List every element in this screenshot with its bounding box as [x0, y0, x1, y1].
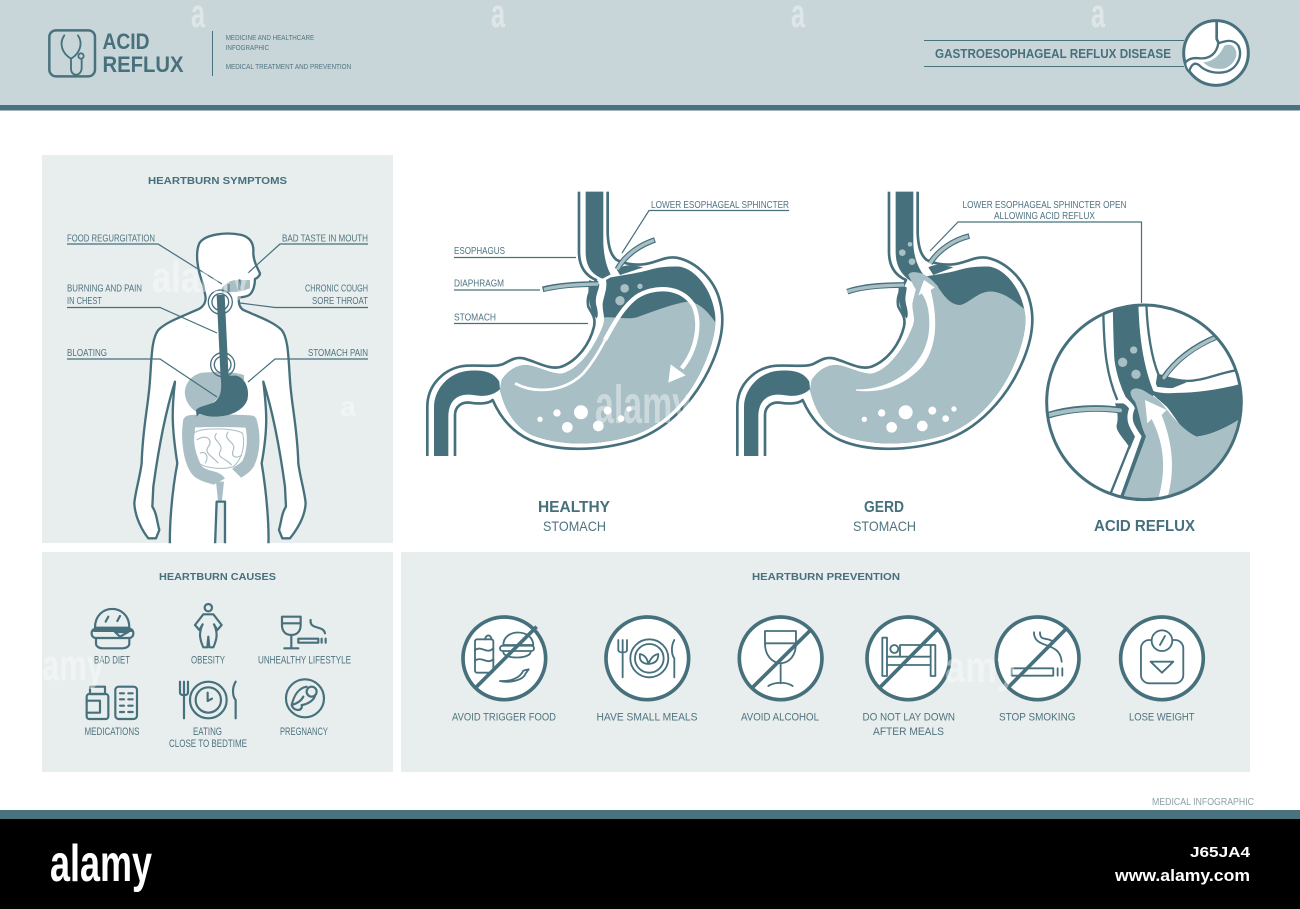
body silhouette — [134, 234, 306, 547]
esophagus lumen and gas — [1113, 302, 1247, 497]
symptom label: stomach pain: STOMACH PAIN — [308, 348, 368, 359]
lower wall — [898, 284, 908, 318]
symptom label: bad taste in mouth: BAD TASTE IN MOUTH — [282, 234, 368, 244]
watermarks — [42, 0, 1105, 692]
small intestine — [194, 429, 244, 468]
white band right — [1138, 308, 1178, 394]
label: pregnancy: PREGNANCY — [280, 726, 328, 738]
icon: obesity — [195, 604, 222, 647]
footer logo: alamy: alamy — [50, 835, 152, 893]
annotation: sphincter open: LOWER ESOPHAGEAL SPHINCTER OPEN — [962, 200, 1126, 211]
symptom label: burning and pain in chest: BURNING AND PAIN — [67, 284, 142, 294]
header subtitle — [212, 31, 351, 76]
title: gerd stomach: GERD — [864, 499, 904, 516]
annotation: lower esophageal sphincter: LOWER ESOPHAGEAL SPHINCTER — [651, 200, 789, 211]
esophagus bubbles — [1118, 346, 1141, 379]
label: bad diet: BAD DIET — [94, 654, 130, 666]
watermarks: a — [340, 391, 356, 422]
header stomach icon — [1184, 21, 1248, 85]
icon: lose weight — [1121, 617, 1203, 700]
header title — [102, 29, 184, 77]
diaphragm right — [930, 236, 969, 263]
header band — [0, 0, 1300, 110]
icon: bad diet burger — [92, 609, 133, 648]
diaphragm right — [1163, 337, 1217, 379]
header title: REFLUX — [102, 52, 184, 77]
reflux arrow — [856, 280, 935, 391]
acid bubbles — [862, 405, 957, 433]
annotation: esophagus: ESOPHAGUS — [454, 246, 505, 257]
body illustration — [134, 234, 306, 547]
symptom label: chronic cough, sore throat: CHRONIC COUGH — [305, 284, 368, 294]
icon: have small meals — [606, 617, 689, 700]
annotation: lower esophageal sphincter — [622, 200, 789, 253]
diaphragm left — [847, 285, 904, 292]
icon: stop smoking — [996, 617, 1079, 700]
liver — [185, 372, 244, 412]
symptom label: chronic cough, sore throat — [240, 284, 368, 308]
panel: causes background — [42, 552, 393, 772]
annotation: stomach: STOMACH — [454, 312, 496, 324]
lower wall — [588, 280, 599, 318]
stomach outline — [427, 187, 722, 462]
duodenum — [434, 371, 500, 456]
label: avoid trigger food: AVOID TRIGGER FOOD — [452, 712, 556, 724]
watermark: alamy over healthy stomach: alamy — [595, 375, 691, 435]
header subtitle: MEDICINE AND HEALTHCARE — [226, 33, 314, 42]
symptom label: chronic cough, sore throat: SORE THROAT — [312, 296, 368, 307]
diaphragm left — [543, 284, 598, 289]
label: avoid alcohol: AVOID ALCOHOL — [741, 712, 819, 724]
title: gerd stomach: STOMACH — [853, 518, 916, 534]
label: eating close to bedtime — [169, 726, 247, 750]
pain ring: throat — [208, 290, 232, 314]
reflux arrow — [1145, 400, 1172, 498]
icon: avoid trigger food — [463, 617, 546, 700]
title: gerd stomach — [853, 499, 916, 534]
duodenum — [744, 371, 810, 456]
watermarks: amy — [945, 643, 1017, 692]
label: unhealthy lifestyle: UNHEALTHY LIFESTYLE — [258, 654, 351, 666]
gerd stomach illustration — [733, 183, 1037, 464]
watermarks: alamy — [152, 253, 250, 302]
diaphragm right — [617, 240, 655, 269]
stomach — [196, 376, 248, 417]
label: medications: MEDICATIONS — [84, 726, 140, 738]
header subtitle: MEDICAL TREATMENT AND PREVENTION — [226, 62, 351, 71]
label: lose weight: LOSE WEIGHT — [1129, 712, 1195, 724]
label: stop smoking: STOP SMOKING — [999, 712, 1076, 724]
pain ring: stomach entry — [211, 353, 235, 377]
label: have small meals: HAVE SMALL MEALS — [596, 712, 698, 724]
label: do not lay down after meals — [862, 712, 955, 738]
symptom label: bloating — [67, 348, 217, 397]
outer wall lines — [1103, 312, 1129, 493]
zoomed acid reflux circle — [1047, 302, 1247, 502]
annotation: sphincter open — [930, 200, 1142, 303]
title: healthy stomach — [538, 499, 610, 534]
symptom label: stomach pain — [248, 348, 368, 382]
panel: symptoms background — [42, 155, 393, 543]
mouth and throat — [222, 280, 250, 293]
header subtitle: INFOGRAPHIC — [226, 43, 270, 52]
symptom label: bad taste in mouth — [248, 234, 368, 273]
footer caption: MEDICAL INFOGRAPHIC — [1152, 797, 1254, 808]
panel: prevention background — [401, 552, 1250, 772]
digestion arrow — [515, 289, 697, 390]
label: do not lay down after meals: DO NOT LAY DOWN — [862, 712, 955, 724]
annotation: sphincter open: ALLOWING ACID REFLUX — [994, 211, 1095, 222]
heading: heartburn prevention: HEARTBURN PREVENTION — [752, 571, 900, 583]
stomach contents — [810, 266, 1026, 444]
acid — [1124, 388, 1238, 498]
healthy stomach illustration — [423, 183, 727, 464]
header right title: gastroesophageal reflux disease: GASTROESOPHAGEAL REFLUX DISEASE — [935, 47, 1171, 61]
label: obesity: OBESITY — [191, 654, 225, 666]
symptom label: burning and pain in chest — [67, 284, 217, 333]
label: eating close to bedtime: EATING — [193, 726, 222, 738]
heading: heartburn symptoms: HEARTBURN SYMPTOMS — [148, 175, 287, 187]
white band left — [1114, 358, 1142, 496]
footer url: www.alamy.com — [1114, 866, 1250, 885]
annotation: diaphragm — [454, 278, 540, 290]
acid reflux tip — [908, 272, 938, 295]
esophagus bubbles — [899, 242, 915, 265]
annotation: stomach — [454, 312, 588, 324]
large intestine — [188, 421, 253, 482]
esophagus lumen — [896, 192, 925, 283]
esophagus lumen — [586, 192, 611, 279]
title: healthy stomach: STOMACH — [543, 518, 606, 534]
annotation: diaphragm: DIAPHRAGM — [454, 278, 504, 290]
icon: unhealthy lifestyle — [282, 617, 326, 648]
header title: ACID — [102, 29, 150, 54]
icon: medications — [87, 687, 137, 719]
left wall lump — [1115, 403, 1135, 449]
header logo: stethoscope icon — [49, 30, 95, 76]
title: healthy stomach: HEALTHY — [538, 499, 610, 516]
stomach outline — [737, 187, 1032, 462]
symptom label: food regurgitation: FOOD REGURGITATION — [67, 234, 155, 244]
symptom label: burning and pain in chest: IN CHEST — [67, 296, 102, 307]
label: eating close to bedtime: CLOSE TO BEDTIME — [169, 738, 247, 750]
acid bubbles — [537, 405, 632, 433]
diaphragm left — [1047, 408, 1122, 416]
annotation: esophagus — [454, 246, 576, 258]
footer image id: J65JA4 — [1190, 844, 1251, 861]
footer band — [0, 810, 1300, 909]
watermarks: amy — [42, 641, 104, 690]
symptom label: bloating: BLOATING — [67, 348, 107, 359]
upper wedge — [1155, 374, 1187, 388]
stomach contents — [500, 266, 716, 444]
label: do not lay down after meals: AFTER MEALS — [873, 726, 944, 738]
esophagus — [221, 295, 225, 378]
icon: avoid alcohol — [739, 617, 822, 700]
icon: pregnancy — [286, 679, 324, 717]
gas bubbles — [615, 284, 643, 305]
heading: heartburn causes: HEARTBURN CAUSES — [159, 571, 276, 583]
symptom label: food regurgitation — [67, 234, 222, 284]
title: acid reflux: ACID REFLUX — [1094, 518, 1195, 535]
icon: eating close to bedtime — [180, 682, 236, 718]
icon: do not lay down after meals — [867, 617, 950, 700]
